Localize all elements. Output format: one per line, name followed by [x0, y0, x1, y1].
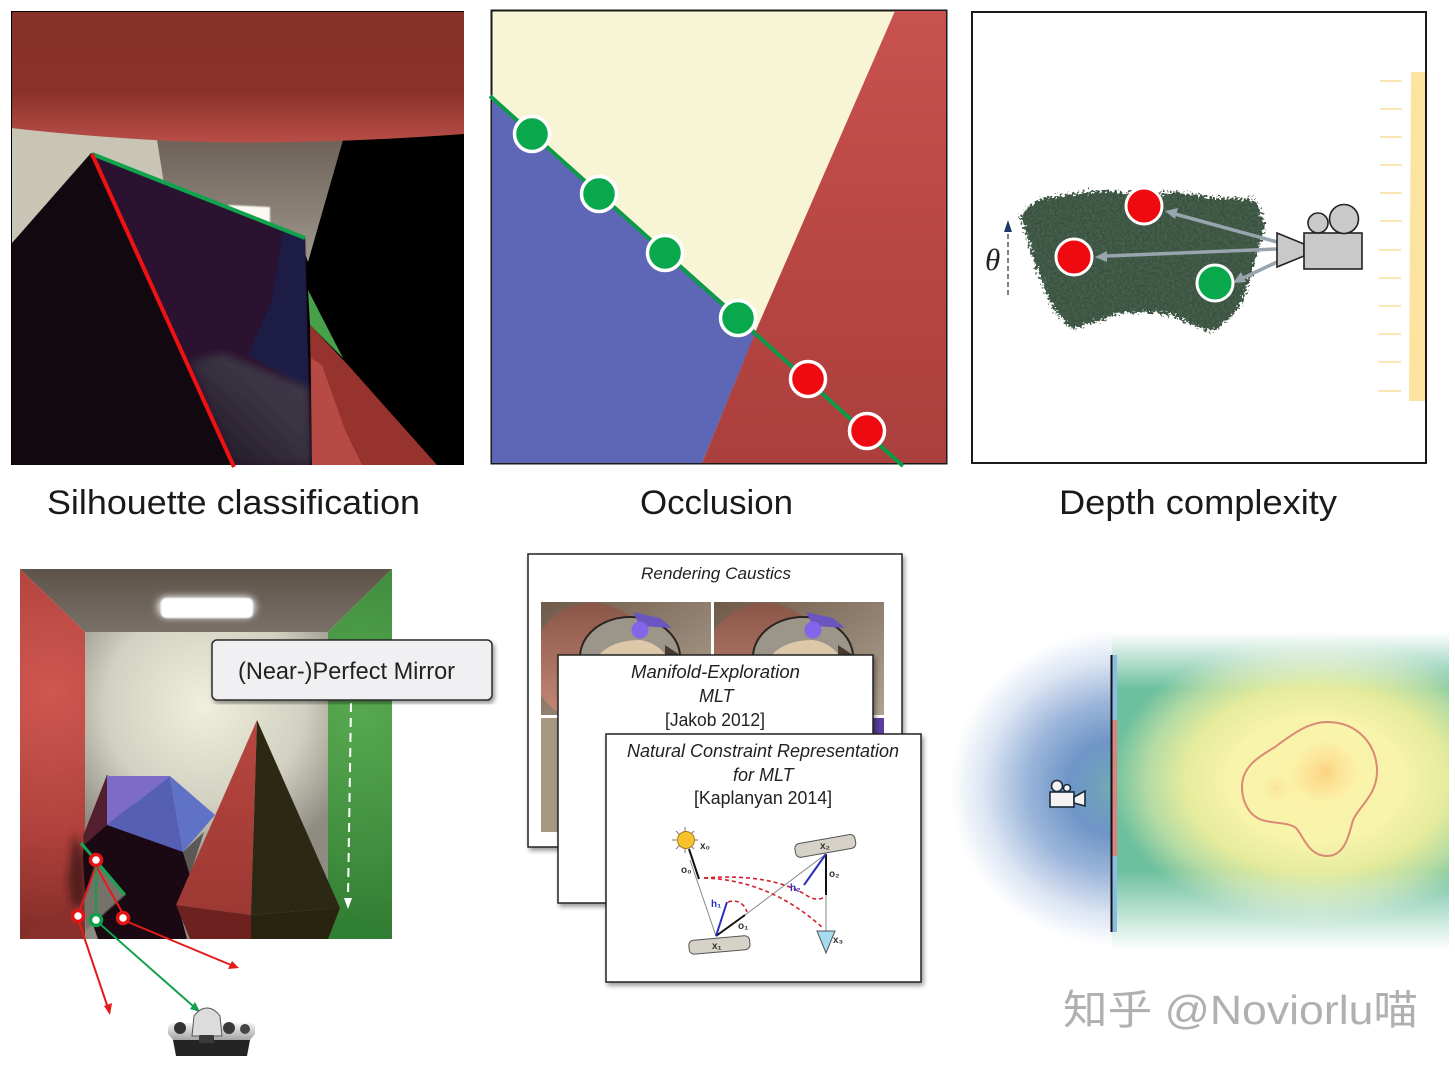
- green wedge: [308, 290, 343, 358]
- red ceiling: [11, 11, 464, 142]
- watermark: 知乎 @Noviorlu喵: [1063, 987, 1418, 1033]
- image plane: [1409, 72, 1425, 401]
- vertex labels: x₁: [712, 941, 722, 952]
- light path: [690, 854, 826, 936]
- constraint diagram: [672, 827, 857, 955]
- grey reflected patch: [84, 862, 125, 930]
- bright spot small: [1262, 774, 1290, 802]
- mirror callout: [212, 640, 492, 700]
- icon: sun: [672, 827, 698, 853]
- grey back wall: [157, 140, 343, 262]
- slide title: [Jakob 2012]: [665, 710, 765, 730]
- polyhedron maroon side: [83, 775, 107, 845]
- green silhouette line: [81, 843, 125, 895]
- vertex labels: [681, 841, 844, 952]
- pyramid dark face: [251, 720, 340, 915]
- dark purple polyhedron face: [91, 153, 310, 465]
- icon: film camera: [1050, 780, 1085, 807]
- vertex labels: x₀: [700, 841, 710, 852]
- polyhedron dark body: [83, 775, 190, 939]
- theta axis arrow: [1004, 220, 1012, 295]
- purple render: [714, 718, 884, 832]
- vertex labels: o₂: [829, 869, 840, 880]
- red floor: [310, 325, 437, 465]
- white dashed arrow: [344, 703, 352, 909]
- red region: [702, 11, 946, 463]
- reflected green wall: [328, 910, 392, 939]
- bright spot main: [1294, 739, 1358, 803]
- red sample top: [1126, 188, 1162, 224]
- right green wall: [328, 569, 392, 939]
- polyhedron grey lower facet: [183, 832, 204, 875]
- slide title: Manifold-Exploration: [631, 662, 800, 682]
- vertex labels: x₂: [820, 841, 830, 852]
- red dashed curves: [704, 877, 825, 928]
- blue field left of screen: [950, 630, 1112, 950]
- screen line: [1112, 655, 1117, 932]
- black tangent vectors: [689, 849, 826, 936]
- mirror callout: (Near-)Perfect Mirror: [238, 658, 455, 685]
- polyhedron blue face: [107, 776, 183, 852]
- level-set contour: [1242, 722, 1377, 856]
- panel: depth complexity: [972, 12, 1426, 463]
- pixel ticks: [1378, 81, 1402, 391]
- back wall: [85, 632, 328, 939]
- theta label: θ: [985, 242, 1000, 277]
- lit polyhedron floor patch: [190, 353, 312, 465]
- slide title: Rendering Caustics: [641, 564, 791, 583]
- slide: manifold exploration: [558, 655, 873, 903]
- top reflector: [794, 834, 857, 858]
- left red wall: [20, 569, 85, 939]
- blue half vectors: [716, 854, 826, 936]
- near black polyhedron face: [12, 153, 234, 465]
- render left: [541, 602, 711, 715]
- blue region: [492, 97, 756, 463]
- slide: rendering caustics: [528, 554, 902, 847]
- green yellow field: [1112, 630, 1449, 950]
- cream left wall: [12, 128, 164, 243]
- reflected dark pyramid: [251, 908, 340, 939]
- red arrows: [79, 866, 239, 1015]
- caption: depth complexity: Depth complexity: [1059, 484, 1337, 522]
- ceiling light: [158, 597, 255, 618]
- polyhedron purple face: [107, 776, 170, 825]
- shadow on red wall: [68, 832, 86, 905]
- polyhedron right face: [170, 776, 215, 852]
- green silhouette line: [92, 154, 305, 238]
- panel: occlusion: [490, 10, 946, 466]
- red sample left: [1056, 239, 1092, 275]
- foliage blob: [1020, 191, 1265, 332]
- caption: occlusion: Occlusion: [640, 484, 793, 522]
- panel: stacked paper slides: [528, 554, 921, 982]
- render right: [714, 602, 884, 715]
- path vertices: [72, 854, 128, 926]
- red silhouette line: [92, 154, 234, 467]
- reflected left wall: [20, 935, 84, 939]
- vertex labels: h₂: [790, 883, 801, 894]
- slide title: for MLT: [733, 765, 796, 785]
- area light glimpse: [228, 205, 270, 226]
- green arrows: [96, 866, 200, 1012]
- red samples: [790, 362, 884, 448]
- pyramid red face: [176, 720, 257, 915]
- caption: silhouette classification: Silhouette classification: [47, 484, 420, 522]
- vertex labels: o₀: [681, 865, 692, 876]
- green sample: [1197, 265, 1233, 301]
- icon: eye cone: [817, 931, 835, 953]
- sand render: [541, 718, 559, 832]
- camera to sample rays: [1095, 208, 1277, 283]
- green samples: [514, 116, 756, 336]
- lit red floor: [311, 358, 362, 465]
- slide title: Natural Constraint Representation: [627, 741, 899, 761]
- icon: film camera: [1277, 204, 1362, 269]
- icon: photo camera: [168, 1008, 255, 1056]
- panel: scalar field heat map: [950, 630, 1449, 950]
- ceiling: [20, 569, 392, 632]
- green edge line: [490, 96, 903, 466]
- panel: silhouette classification: [11, 11, 464, 467]
- bottom reflector: [688, 935, 750, 955]
- vertex labels: x₃: [833, 935, 844, 946]
- blue polyhedron face: [248, 232, 309, 390]
- vertex labels: o₁: [738, 921, 748, 932]
- vertex labels: h₁: [711, 899, 721, 910]
- reflected red pyramid: [176, 905, 251, 939]
- slide: natural constraint representation: [606, 734, 921, 982]
- slide title: [Kaplanyan 2014]: [694, 788, 832, 808]
- slide title: MLT: [699, 686, 736, 706]
- panel: cornell box with mirror: [20, 569, 492, 1056]
